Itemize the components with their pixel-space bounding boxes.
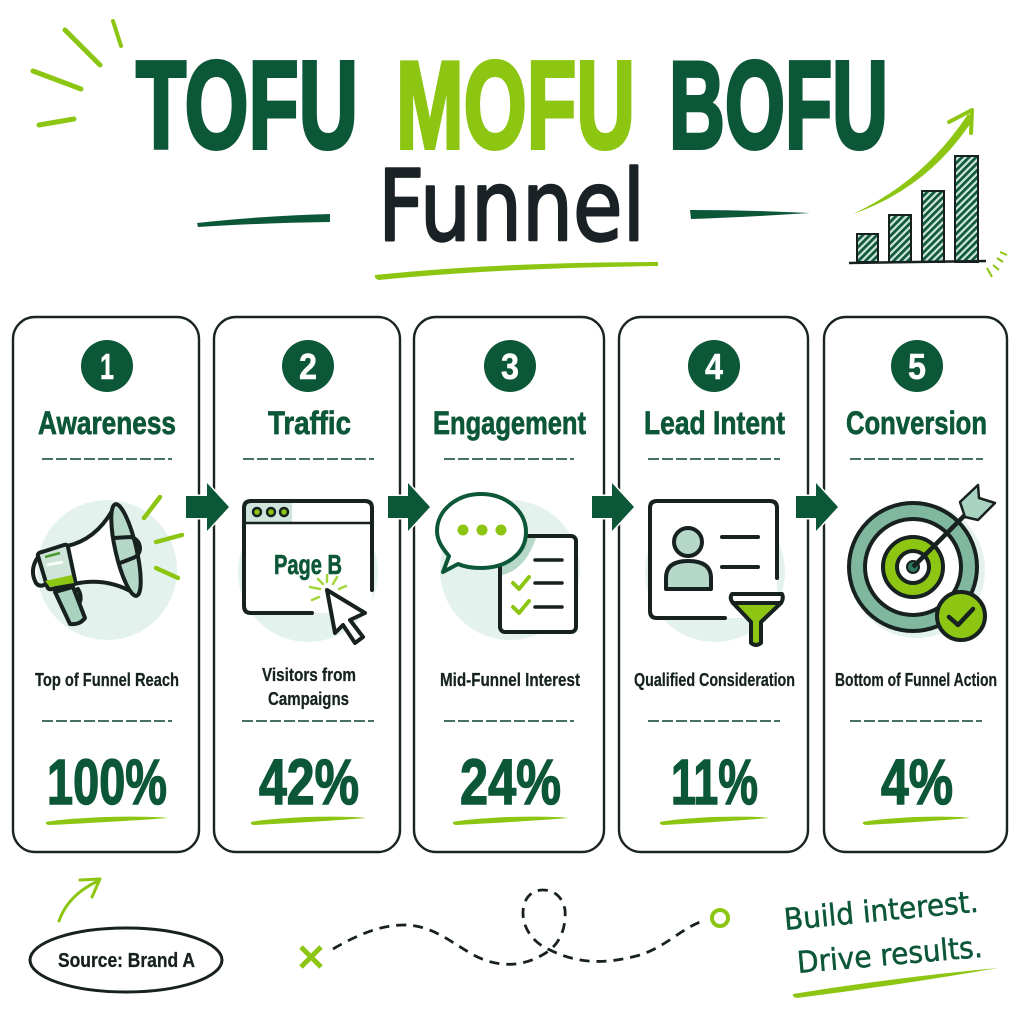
panel: traffic (214, 317, 400, 852)
metric: 100%: 100% (47, 746, 167, 818)
panel: lead intent (619, 317, 808, 852)
metric: 24%: 24% (460, 746, 561, 818)
heading: Conversion: Conversion (846, 405, 987, 441)
arrow: awareness to traffic (186, 483, 229, 531)
description: qualified consideration: Qualified Consideration (634, 670, 795, 690)
source label (30, 928, 222, 992)
tagline: Build interest. (782, 885, 980, 938)
description: mid-funnel interest: Mid-Funnel Interest (440, 670, 580, 690)
title (136, 37, 888, 175)
heading: Engagement: Engagement (433, 405, 586, 441)
title: BOFU (669, 37, 888, 175)
icon: profile card and funnel (645, 501, 785, 645)
description: visitors from campaigns (262, 665, 356, 709)
step number 1: 1 (100, 346, 114, 387)
heading: Traffic: Traffic (268, 405, 351, 441)
metric: 4%: 4% (881, 746, 953, 818)
arrow: traffic to engagement (388, 483, 430, 531)
arrow: engagement to lead intent (592, 483, 634, 531)
growth bar chart icon (849, 110, 1007, 277)
step number 2 (282, 340, 334, 392)
metric: 42%: 42% (259, 746, 359, 818)
icon: target with arrow and check badge (849, 485, 995, 640)
step number 3: 3 (501, 346, 519, 387)
description: visitors from campaigns: Campaigns (268, 689, 349, 709)
decorative sparks: top left (33, 21, 121, 125)
step number 5: 5 (908, 346, 926, 387)
source label: Source: Brand A (58, 950, 195, 972)
metric: 11%: 11% (671, 746, 758, 818)
step number 3 (484, 340, 536, 392)
title: TOFU (136, 37, 358, 175)
panel: awareness (13, 317, 199, 852)
step number 1 (81, 340, 133, 392)
arrow: source pointer (59, 879, 100, 921)
description: top of funnel reach: Top of Funnel Reach (35, 670, 179, 690)
step number 4: 4 (705, 346, 723, 387)
dashed journey path (301, 890, 728, 967)
icon: browser window with cursor: Page B (274, 549, 342, 580)
panel: conversion (824, 317, 1007, 852)
subtitle: Funnel: Funnel (378, 150, 645, 264)
step number 4 (688, 340, 740, 392)
icon: speech bubble and checklist (437, 494, 580, 640)
description: visitors from campaigns: Visitors from (262, 665, 356, 685)
heading: Awareness: Awareness (38, 405, 176, 441)
tagline: Drive results. (796, 930, 984, 981)
heading: Lead Intent: Lead Intent (644, 405, 785, 441)
icon: megaphone (33, 497, 182, 640)
icon: browser window with cursor (238, 501, 378, 643)
step number 5 (891, 340, 943, 392)
title: MOFU (396, 37, 635, 175)
panel: engagement (414, 317, 604, 852)
step number 2: 2 (299, 346, 317, 387)
arrow: lead intent to conversion (796, 483, 838, 531)
tagline (782, 885, 998, 998)
brush strokes around subtitle (197, 210, 810, 280)
